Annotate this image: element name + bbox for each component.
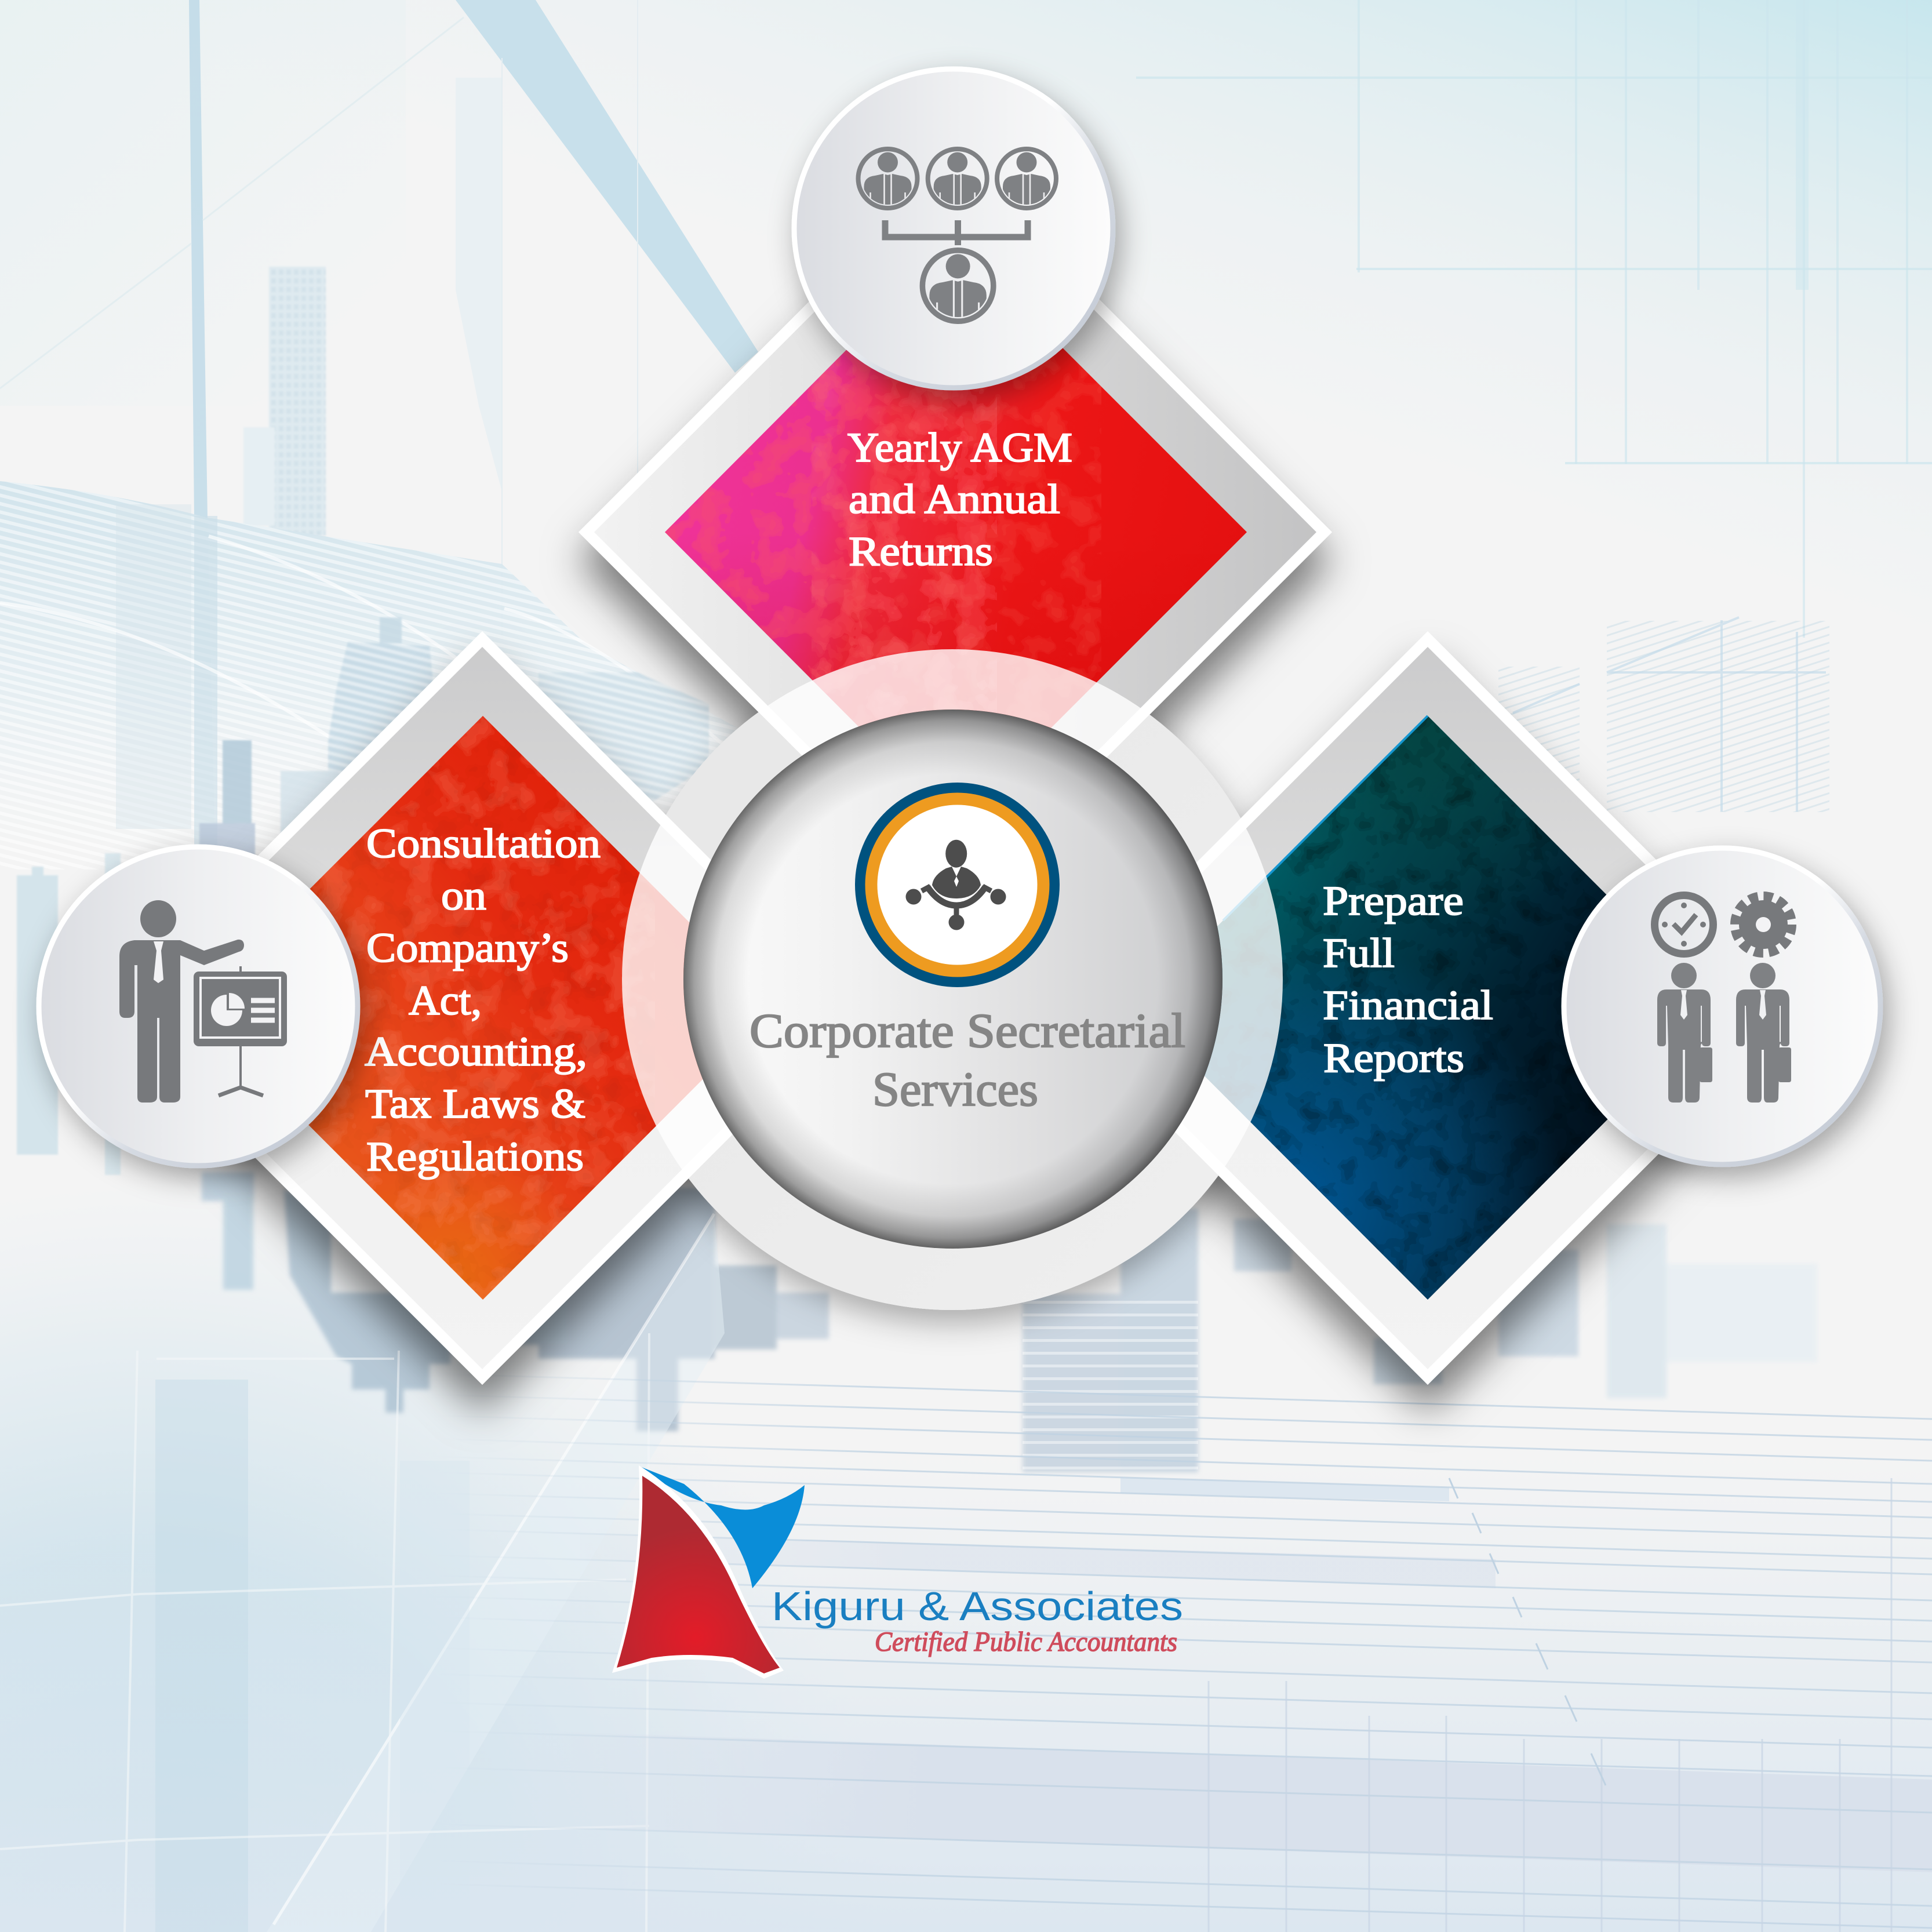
text: Prepare Full Financial Reports: Financial — [1323, 982, 1493, 1028]
panel: central circle — [683, 710, 1222, 1249]
panel: Consultation diamond — [201, 632, 747, 1430]
panel: Financial Reports diamond — [1159, 632, 1711, 1430]
title: Corporate Secretarial Services: Corporate Secretarial — [749, 1004, 1185, 1058]
icon: business people with clock and gear — [1654, 895, 1792, 1103]
text: Yearly AGM and Annual Returns: Returns — [849, 528, 993, 574]
title: Corporate Secretarial Services — [749, 1004, 1185, 1116]
panel: left icon circle — [39, 847, 358, 1166]
text: Consultation on Company's Act, Accounting, Tax Laws & Regulations — [365, 820, 601, 1180]
text: Prepare Full Financial Reports: Full — [1323, 930, 1395, 976]
central ring shadow — [622, 649, 1283, 1310]
text: tagline: Certified Public Accountants — [875, 1627, 1177, 1657]
central ring: opaque over background — [666, 712, 1240, 1304]
text: Consultation on Company's Act, Accounting, Tax Laws & Regulations: Act, — [409, 977, 482, 1024]
upper-right window grid — [1136, 0, 1932, 638]
title: Corporate Secretarial Services: Services — [872, 1063, 1038, 1116]
icon: three people reporting to one — [858, 149, 1056, 321]
reflected skyline, right — [1023, 1209, 1817, 1472]
text: Consultation on Company's Act, Accounting, Tax Laws & Regulations: Company’s — [366, 925, 569, 971]
text: Consultation on Company's Act, Accounting, Tax Laws & Regulations: Tax Laws & — [365, 1080, 585, 1127]
diagonal light streak — [267, 1214, 725, 1932]
logo: Kiguru & Associates — [612, 1465, 1183, 1679]
panel: top icon circle — [794, 69, 1113, 388]
text: Yearly AGM and Annual Returns: Yearly AGM — [847, 424, 1072, 471]
text: Yearly AGM and Annual Returns: and Annual — [849, 476, 1060, 522]
panel: right icon circle — [1564, 848, 1880, 1165]
upper-left towers and beams — [0, 0, 758, 869]
text: Consultation on Company's Act, Accounting, Tax Laws & Regulations: Consultation — [366, 820, 601, 867]
icon: central emblem badge — [855, 783, 1060, 987]
text: company name: Kiguru & Associates — [772, 1584, 1183, 1629]
icon: sail mark — [612, 1465, 805, 1679]
icon: presenter with chart board — [119, 900, 287, 1103]
floor planks — [435, 1374, 1932, 1932]
text: Prepare Full Financial Reports — [1323, 878, 1493, 1081]
text: Yearly AGM and Annual Returns — [847, 424, 1072, 574]
text: Prepare Full Financial Reports: Prepare — [1323, 878, 1464, 924]
curved roof band — [0, 481, 754, 875]
panel: Yearly AGM diamond — [561, 293, 1349, 765]
mid skyline buildings — [17, 617, 709, 1175]
text: Consultation on Company's Act, Accounting, Tax Laws & Regulations: Accounting, — [365, 1028, 587, 1075]
text: Consultation on Company's Act, Accounting, Tax Laws & Regulations: on — [441, 872, 486, 919]
text: Consultation on Company's Act, Accounting, Tax Laws & Regulations: Regulations — [366, 1133, 584, 1180]
text: Prepare Full Financial Reports: Reports — [1323, 1035, 1464, 1081]
central ring: translucent over diamonds — [622, 649, 1283, 1178]
lower-left glass panes — [0, 1333, 649, 1932]
right-side pale building — [1498, 617, 1829, 812]
reflected skyline, left — [202, 1172, 829, 1431]
